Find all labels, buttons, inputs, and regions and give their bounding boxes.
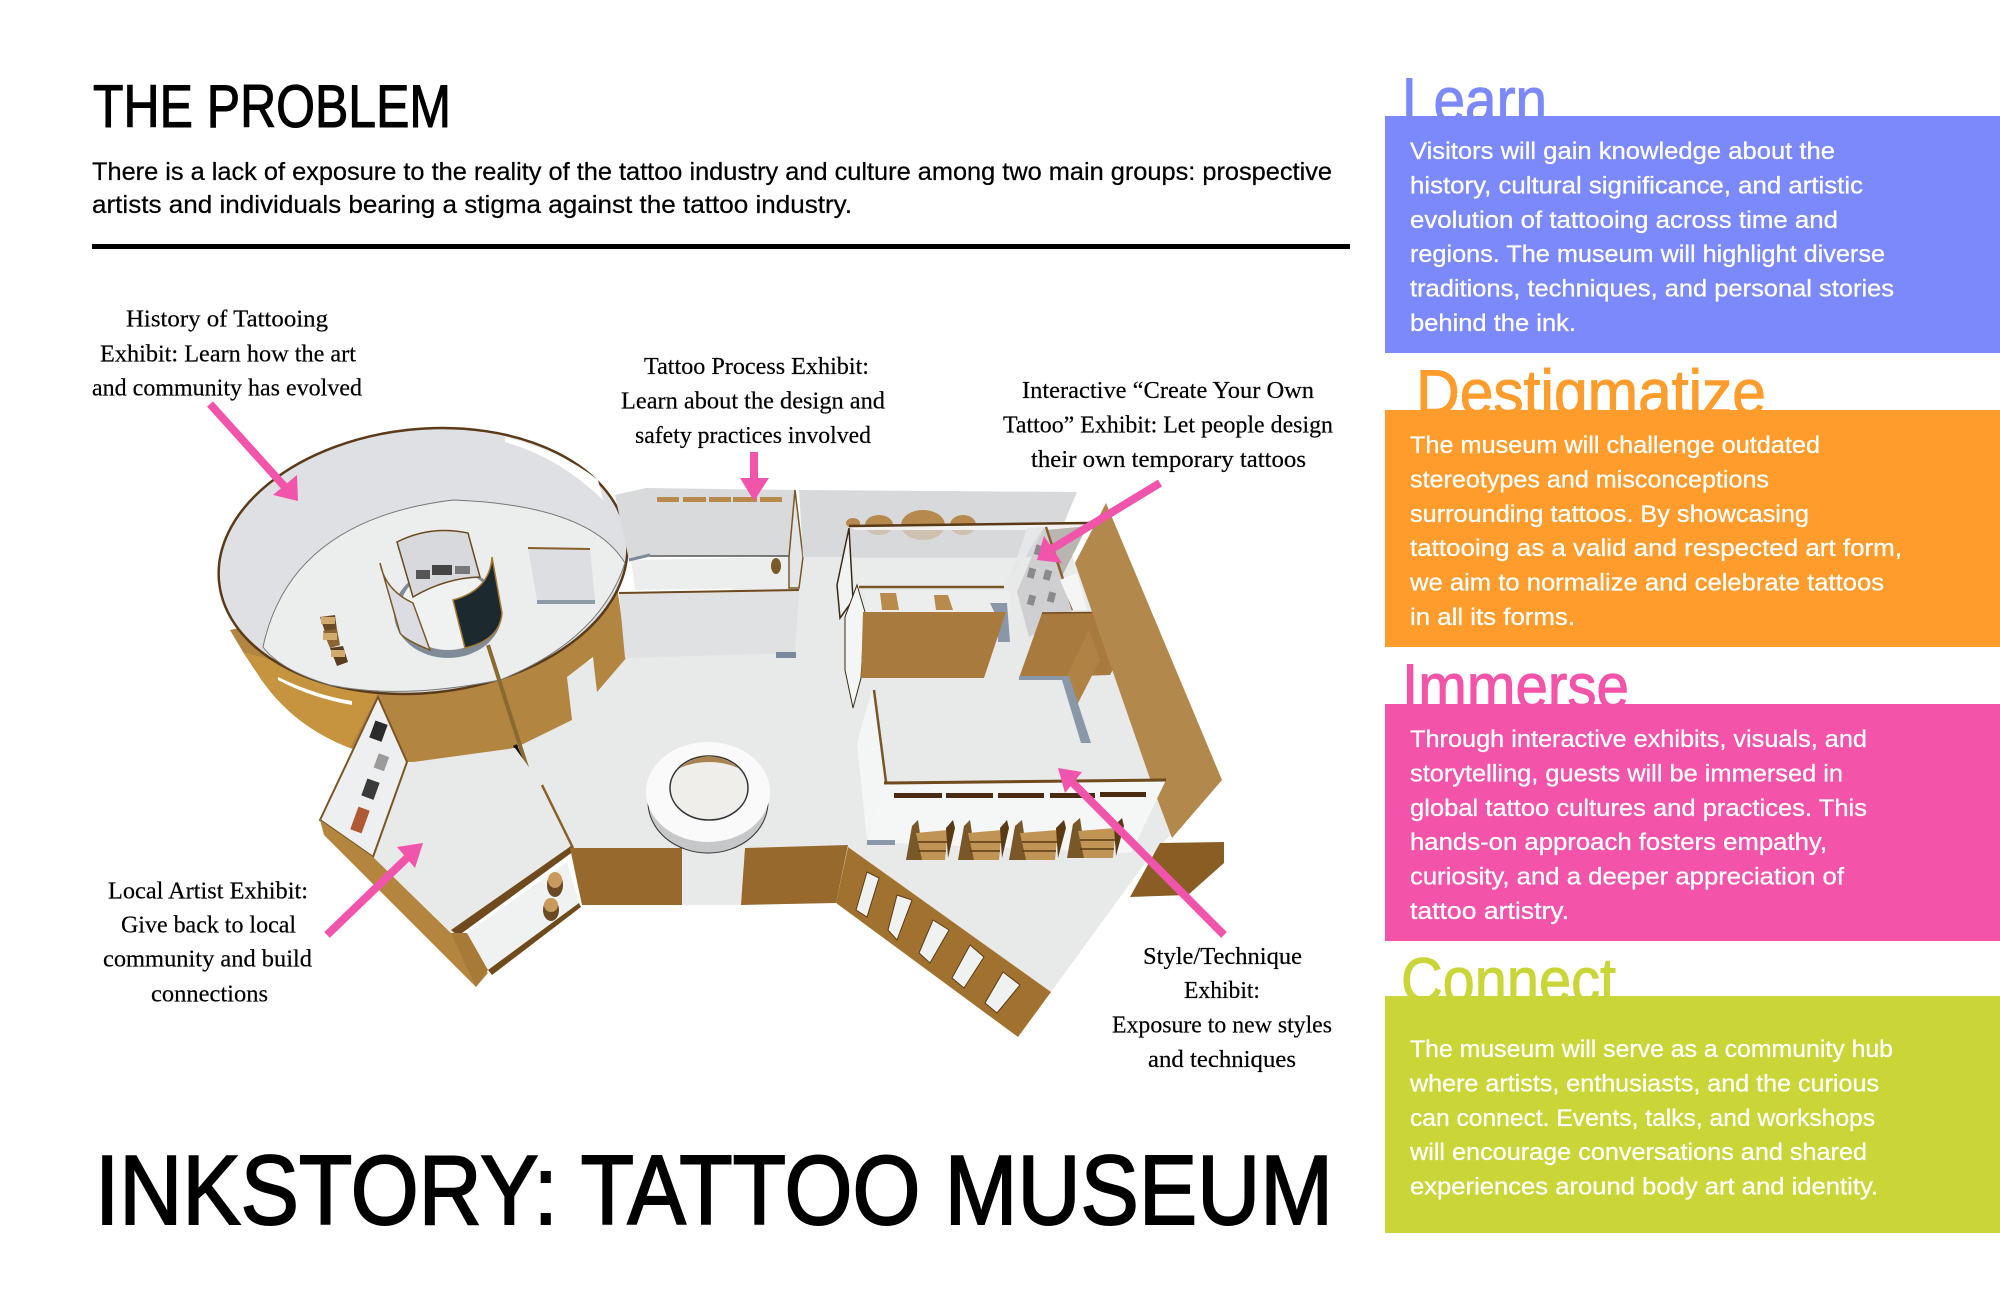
panel: destigmatize [1385,358,2000,647]
panel: immerse: tattoo artistry. [1410,898,1569,925]
panel: learn: traditions, techniques, and personal stories [1410,276,1894,303]
museum model [205,408,1224,1037]
label: style technique: Style/Technique [1143,944,1302,970]
text block: problem statement [92,158,1332,219]
panel: immerse: curiosity, and a deeper appreciation of [1410,864,1844,891]
panel: connect: will encourage conversations and shared [1409,1139,1867,1166]
label: tattoo process: Tattoo Process Exhibit: [644,354,869,380]
text block: problem statement: artists and individuals bearing a stigma against the tattoo industry. [92,191,852,219]
arrow: style technique exhibit [1058,768,1224,935]
label: tattoo process: Learn about the design and [621,388,885,414]
style and technique room [857,690,1166,860]
label: history of tattooing: Exhibit: Learn how the art [100,342,356,368]
panel: learn: Learn [1402,66,1547,136]
round room window slot [278,677,352,705]
square display panel [528,548,595,604]
panel: immerse: hands-on approach fosters empathy, [1410,829,1827,856]
divider wall [488,645,538,802]
label: create your own tattoo: Tattoo” Exhibit: Let people design [1003,412,1333,438]
panel: destigmatize: stereotypes and misconceptions [1410,466,1769,493]
panel: connect: Connect [1401,946,1616,1016]
panel: immerse: global tattoo cultures and practices. This [1410,795,1867,822]
text block: problem statement: There is a lack of exposure to the reality of the tattoo industry and culture among two main groups: prospective [92,158,1332,186]
poster wall [1017,527,1073,637]
centre curved exhibit [380,530,502,658]
panel: learn: Visitors will gain knowledge about the [1410,138,1835,165]
panel: immerse: Through interactive exhibits, visuals, and [1410,726,1867,753]
panel: immerse [1385,652,2000,941]
arrow: tattoo process exhibit [740,452,769,501]
arrow: local artist exhibit [327,843,423,935]
panel: immerse: Immerse [1402,652,1629,722]
tattoo process room [615,488,803,658]
label: local artist [103,878,312,1008]
panel: connect: The museum will serve as a community hub [1410,1036,1893,1063]
panel: learn: regions. The museum will highlight diverse [1410,241,1885,268]
front cardboard walls [570,842,1224,1037]
panel: immerse: storytelling, guests will be immersed in [1410,760,1843,787]
panel: connect [1385,946,2000,1233]
label: tattoo process: safety practices involved [635,423,871,449]
stools [320,615,348,666]
label: history of tattooing: History of Tattooing [126,306,328,332]
label: style technique: Exposure to new styles [1112,1012,1332,1038]
arrow: create your own exhibit [1037,483,1160,563]
panel: destigmatize: in all its forms. [1410,604,1575,631]
label: local artist: connections [151,982,268,1008]
label: local artist: Give back to local [121,912,296,938]
donut exhibit [646,742,770,853]
label: tattoo process [621,354,885,449]
label: local artist: Local Artist Exhibit: [108,878,308,904]
round room interior [205,408,641,714]
panel: destigmatize: tattooing as a valid and respected art form, [1410,535,1902,562]
panel: destigmatize: surrounding tattoos. By showcasing [1410,501,1809,528]
panel: learn: history, cultural significance, and artistic [1410,172,1863,199]
main title: INKSTORY: TATTOO MUSEUM [95,1135,1333,1245]
panel: destigmatize: The museum will challenge outdated [1410,432,1820,459]
heading: the problem: THE PROBLEM [93,73,451,140]
gift and mural room [837,510,1143,743]
arrow: history exhibit [210,404,298,501]
label: style technique: Exhibit: [1184,978,1260,1004]
lower left room [320,697,581,987]
label: create your own tattoo [1003,378,1333,473]
panel: connect: where artists, enthusiasts, and the curious [1409,1070,1879,1097]
right cardboard wall [1075,503,1222,838]
label: style technique: and techniques [1148,1047,1296,1073]
panel: learn: evolution of tattooing across time and [1410,207,1838,234]
back wall [799,490,1077,557]
panel: destigmatize: Destigmatize [1416,358,1766,428]
label: create your own tattoo: Interactive “Create Your Own [1022,378,1314,404]
label: create your own tattoo: their own temporary tattoos [1031,447,1306,473]
panel: connect: can connect. Events, talks, and workshops [1410,1105,1875,1132]
label: history of tattooing [92,306,362,402]
bookshelves [906,818,1124,860]
panel: learn: behind the ink. [1410,310,1576,337]
label: style technique [1112,944,1332,1073]
panel: connect: experiences around body art and identity. [1410,1174,1878,1201]
panel: destigmatize: we aim to normalize and celebrate tattoos [1409,570,1884,597]
round room outer cardboard wall [230,540,627,762]
label: local artist: community and build [103,946,312,972]
panel: learn [1385,66,2000,353]
label: history of tattooing: and community has evolved [92,376,362,402]
main floor [470,550,1175,992]
